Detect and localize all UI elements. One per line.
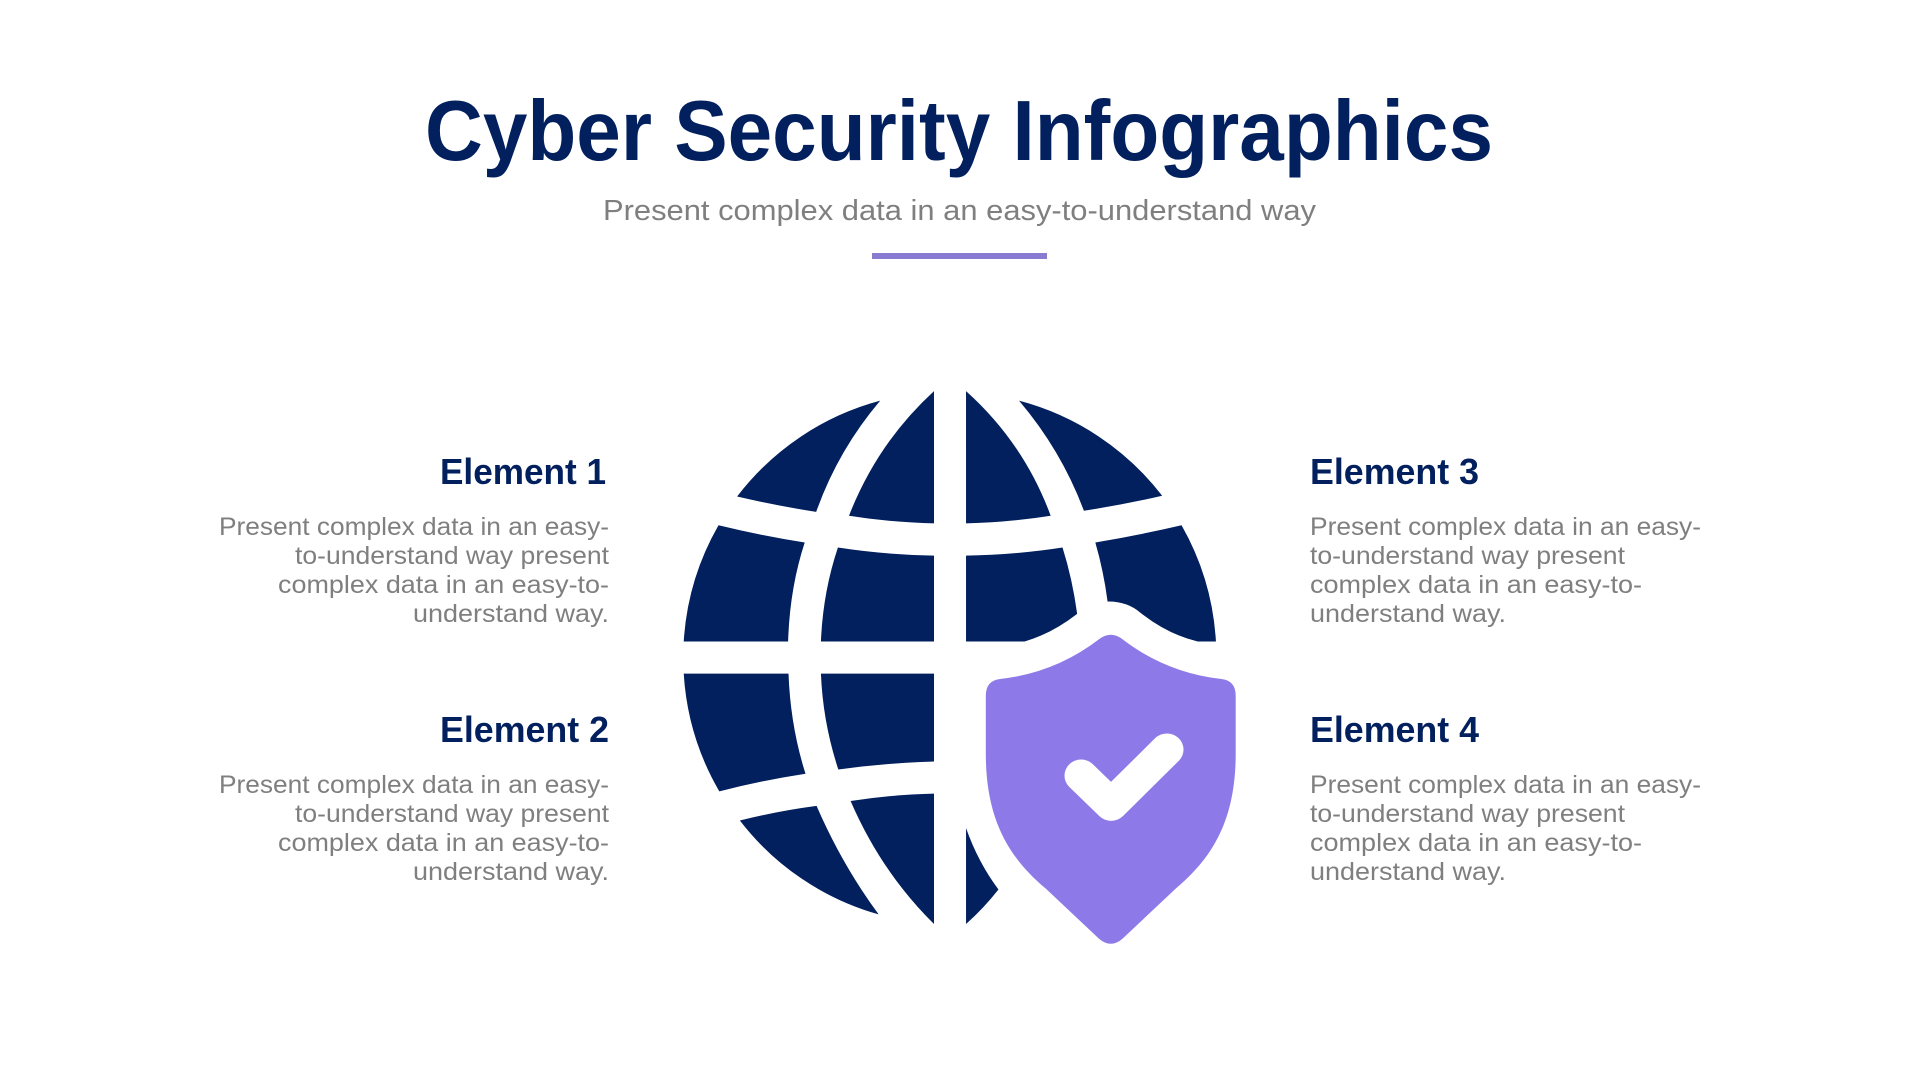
body: Element 1: Present complex data in an easy- [219, 513, 609, 541]
text block: Element 2 [219, 709, 609, 886]
body: Element 2 [219, 771, 609, 886]
heading: Element 1: Element 1 [440, 451, 606, 492]
heading: Element 3: Element 3 [1310, 451, 1479, 492]
title accent bar [872, 253, 1047, 259]
heading: Element 4: Element 4 [1310, 709, 1479, 750]
body: Element 3: understand way. [1310, 600, 1506, 628]
body: Element 3 [1310, 513, 1701, 628]
body: Element 4: to-understand way present [1310, 800, 1625, 828]
body: Element 4: Present complex data in an easy- [1310, 771, 1701, 799]
body: Element 4 [1310, 771, 1701, 886]
icon: shield with check mark [986, 635, 1236, 944]
subtitle: Present complex data in an easy-to-understand way [603, 195, 1317, 227]
heading: Element 2: Element 2 [440, 709, 609, 750]
text block: Element 4 [1310, 709, 1701, 886]
body: Element 2: to-understand way present [295, 800, 609, 828]
body: Element 2: Present complex data in an easy- [219, 771, 609, 799]
text block: Element 1 [219, 451, 609, 628]
body: Element 2: complex data in an easy-to- [278, 829, 609, 857]
body: Element 3: to-understand way present [1310, 542, 1625, 570]
text block: Element 3 [1310, 451, 1701, 628]
body: Element 1 [219, 513, 609, 628]
body: Element 4: understand way. [1310, 858, 1506, 886]
body: Element 4: complex data in an easy-to- [1310, 829, 1642, 857]
title: Cyber Security Infographics [425, 84, 1493, 179]
body: Element 1: complex data in an easy-to- [278, 571, 609, 599]
body: Element 3: Present complex data in an easy- [1310, 513, 1701, 541]
body: Element 1: to-understand way present [295, 542, 609, 570]
icon: globe [684, 391, 1216, 924]
body: Element 2: understand way. [413, 858, 609, 886]
body: Element 1: understand way. [413, 600, 609, 628]
body: Element 3: complex data in an easy-to- [1310, 571, 1642, 599]
